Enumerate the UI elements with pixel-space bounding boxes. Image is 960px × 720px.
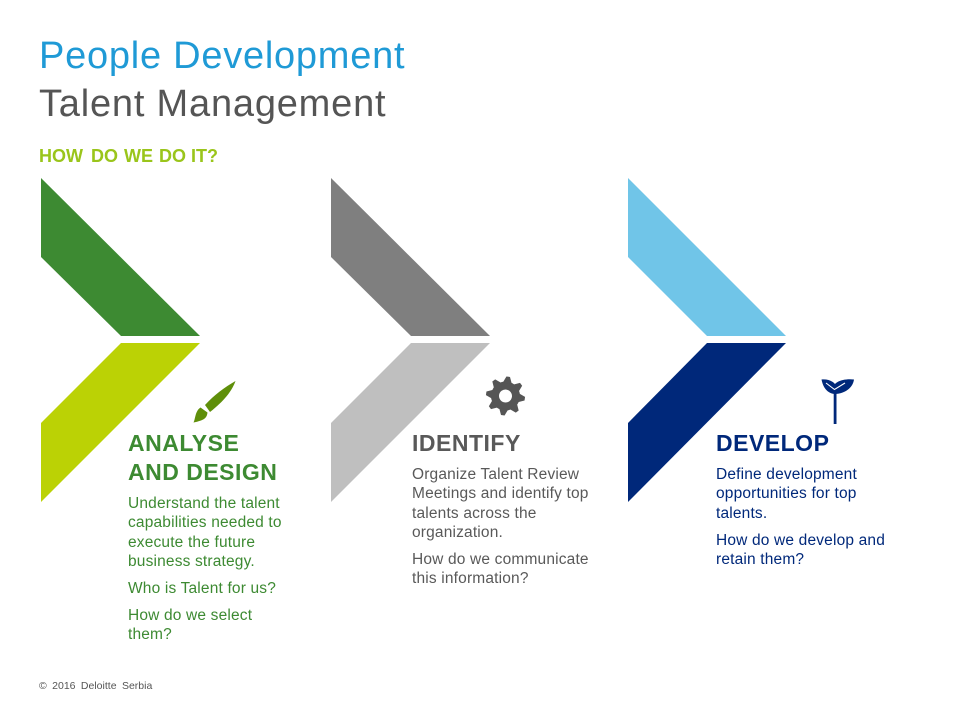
body: analyse: Understand the talent — [128, 495, 280, 512]
text block: develop: opportunities for top — [716, 485, 857, 502]
chevron: identify — [331, 178, 490, 502]
heading: analyse and design: ANALYSE — [128, 430, 239, 456]
section heading: WE — [124, 146, 153, 166]
text block: analyse and design: execute the future — [128, 534, 255, 551]
text block: analyse and design: Who is Talent for us? — [128, 580, 276, 597]
text block: analyse and design — [128, 430, 282, 643]
text block: develop — [716, 430, 885, 568]
text block: analyse and design: business strategy. — [128, 553, 255, 570]
text block: develop: How do we develop and — [716, 532, 885, 549]
section heading: DO — [159, 146, 186, 166]
subtitle: Talent Management — [39, 83, 386, 125]
body: identify: Organize Talent Review — [412, 466, 579, 483]
text block: analyse and design: AND DESIGN — [128, 459, 277, 485]
title: People Development — [39, 35, 405, 77]
text block: identify: this information? — [412, 570, 529, 587]
text block: identify: organization. — [412, 524, 503, 541]
text block: develop: talents. — [716, 505, 767, 522]
text block: identify: How do we communicate — [412, 551, 589, 568]
heading: identify: IDENTIFY — [412, 430, 521, 456]
text block: analyse and design: How do we select — [128, 607, 252, 624]
section heading: HOW — [39, 146, 83, 166]
text block: identify: Meetings and identify top — [412, 485, 589, 502]
text block: analyse and design: capabilities needed to — [128, 514, 282, 531]
text block: develop: retain them? — [716, 551, 804, 568]
text block: identify: talents across the — [412, 505, 537, 522]
heading: develop: DEVELOP — [716, 430, 829, 456]
chevron: analyse and design — [41, 178, 200, 502]
section heading: DO — [91, 146, 118, 166]
body: develop: Define development — [716, 466, 857, 483]
footer copyright: © 2016 Deloitte Serbia — [39, 680, 152, 692]
section heading — [39, 146, 218, 166]
section heading: IT? — [191, 146, 218, 166]
text block: analyse and design: them? — [128, 626, 172, 643]
text block: identify — [412, 430, 589, 587]
chevron: develop — [628, 178, 786, 502]
